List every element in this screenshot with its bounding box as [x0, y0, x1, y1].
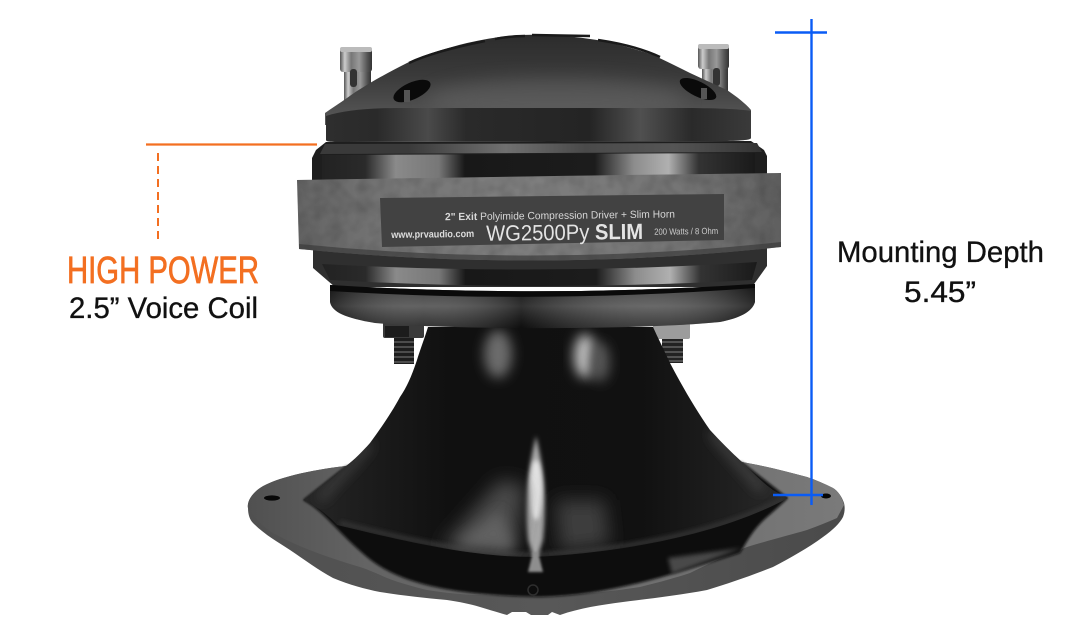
label heading: 2" Exit Polyimide Compression Driver + Slim Horn	[445, 208, 675, 223]
lower ring	[313, 248, 767, 287]
right mounting stud	[653, 323, 690, 363]
horn black lip	[303, 462, 788, 597]
callout heading: HIGH POWER	[67, 250, 259, 292]
horn flange	[248, 462, 845, 615]
dome cap	[325, 35, 751, 125]
label plate	[380, 194, 724, 247]
dome glow	[426, 78, 686, 122]
depth value: 5.45”	[904, 276, 976, 309]
top rim band	[326, 108, 751, 142]
callout subheading: 2.5” Voice Coil	[69, 292, 258, 325]
label website: www.prvaudio.com	[390, 229, 474, 241]
horn body	[303, 327, 788, 557]
left terminal post	[340, 47, 372, 100]
label rating: 200 Watts / 8 Ohm	[654, 226, 718, 237]
blue depth dimension line	[773, 19, 827, 505]
dome vent slots	[390, 73, 719, 107]
right terminal post	[698, 44, 729, 94]
middle ring plate	[320, 143, 762, 154]
body bottom shade	[299, 242, 781, 261]
lower cup seam	[330, 284, 755, 297]
magnet body	[297, 173, 781, 261]
lip sheen	[668, 548, 742, 574]
label model: WG2500Py SLIM	[486, 219, 643, 246]
lower cup sheen	[330, 284, 755, 328]
depth label: Mounting Depth	[837, 236, 1044, 269]
orange callout leader	[146, 144, 317, 239]
dome top ridges	[409, 35, 660, 63]
left mounting stud	[383, 321, 424, 364]
middle ring	[312, 141, 767, 182]
horn highlights	[320, 330, 785, 556]
product label	[380, 194, 724, 247]
lower ring banded metal	[322, 262, 757, 286]
lower cup	[330, 284, 755, 328]
speaker driver and horn	[248, 35, 845, 615]
horn front details	[528, 552, 543, 595]
flange top surface	[248, 462, 844, 597]
middle ring banded metal	[322, 153, 755, 180]
flange screw holes	[264, 494, 831, 501]
